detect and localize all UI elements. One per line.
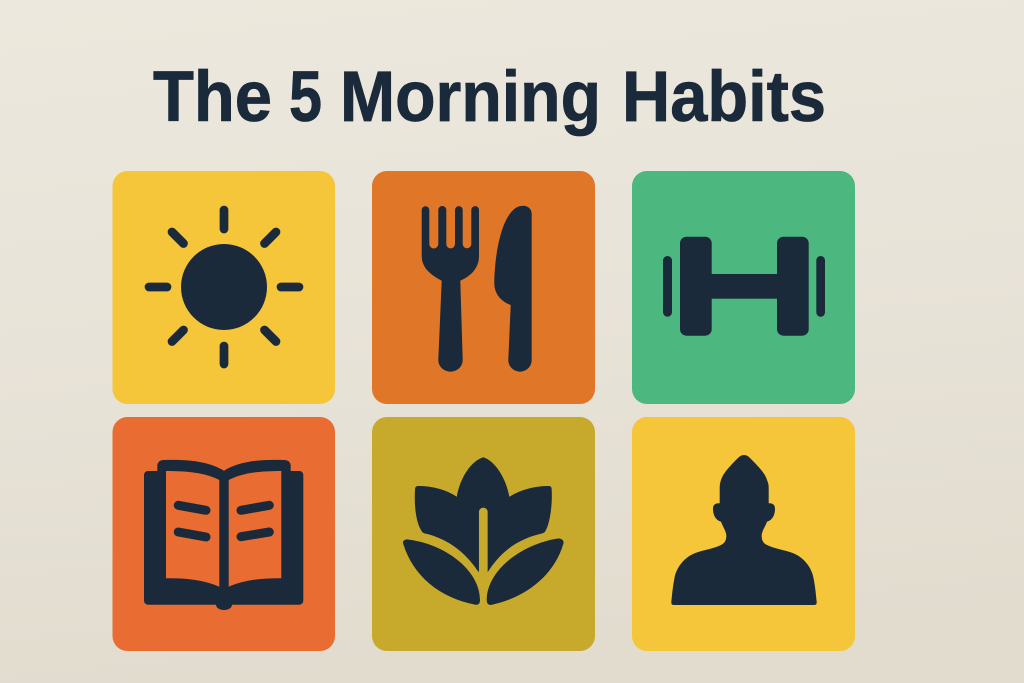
panel: meditating person — [632, 417, 855, 651]
title — [153, 58, 826, 137]
panel: book — [112, 417, 335, 651]
title: The — [153, 58, 272, 137]
icon: person silhouette — [671, 455, 817, 605]
icon: fork — [422, 206, 479, 372]
panel: dumbbell — [632, 171, 855, 404]
icon: sun — [149, 210, 299, 364]
icon: knife — [494, 206, 532, 372]
icon: open book — [144, 460, 303, 610]
panel: sun — [112, 171, 335, 404]
icon: dumbbell — [663, 237, 825, 336]
title: 5 — [289, 58, 322, 137]
title: Morning — [340, 58, 601, 137]
title: Habits — [622, 58, 826, 137]
panel: lotus — [372, 417, 595, 651]
panel: fork and knife — [372, 171, 595, 404]
icon: lotus — [403, 457, 564, 605]
